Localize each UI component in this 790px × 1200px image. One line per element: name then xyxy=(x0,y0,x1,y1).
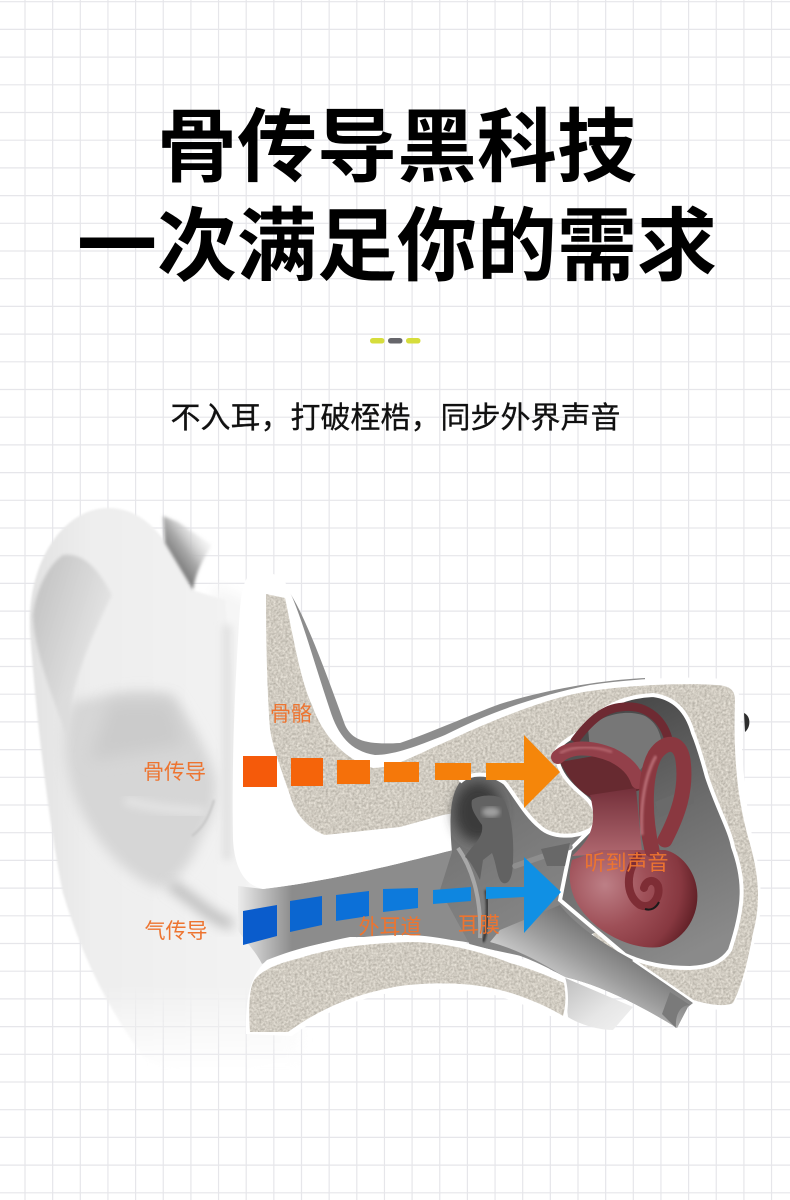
ear canal xyxy=(238,850,688,1028)
ossicles xyxy=(465,796,570,883)
middle ear cavity xyxy=(440,775,600,960)
inner ear: semicircular canals and cochlea xyxy=(558,707,697,948)
orange bone conduction arrow xyxy=(243,735,560,808)
soft tissue, lower xyxy=(246,935,568,1036)
label: eardrum: 耳膜 xyxy=(458,914,500,937)
title xyxy=(77,103,717,291)
subtitle: 不入耳，打破桎梏，同步外界声音 xyxy=(170,402,620,435)
label: bone conduction: 骨传导 xyxy=(143,761,206,784)
label: air conduction: 气传导 xyxy=(144,920,208,943)
labels xyxy=(143,703,668,943)
dark skin strip above bone xyxy=(288,590,645,770)
title: 骨传导黑科技 xyxy=(157,103,637,192)
small dark marker xyxy=(744,713,749,732)
divider dots xyxy=(370,338,420,344)
label: hearing sound: 听到声音 xyxy=(584,852,668,875)
ear and cross-section illustration xyxy=(30,508,761,1073)
bone, upper xyxy=(266,594,758,1005)
label: ear canal: 外耳道 xyxy=(358,916,422,939)
label: bone: 骨骼 xyxy=(270,703,312,726)
bone, lower xyxy=(249,942,565,1032)
blue air conduction arrow xyxy=(243,857,561,945)
eardrum xyxy=(458,848,487,942)
outer ear xyxy=(29,508,263,1026)
soft tissue, upper xyxy=(233,572,761,1010)
title: 一次满足你的需求 xyxy=(77,202,717,291)
inner ear cavity xyxy=(557,695,742,968)
canal tube highlight xyxy=(490,905,693,1028)
bottom plate xyxy=(563,977,633,1030)
